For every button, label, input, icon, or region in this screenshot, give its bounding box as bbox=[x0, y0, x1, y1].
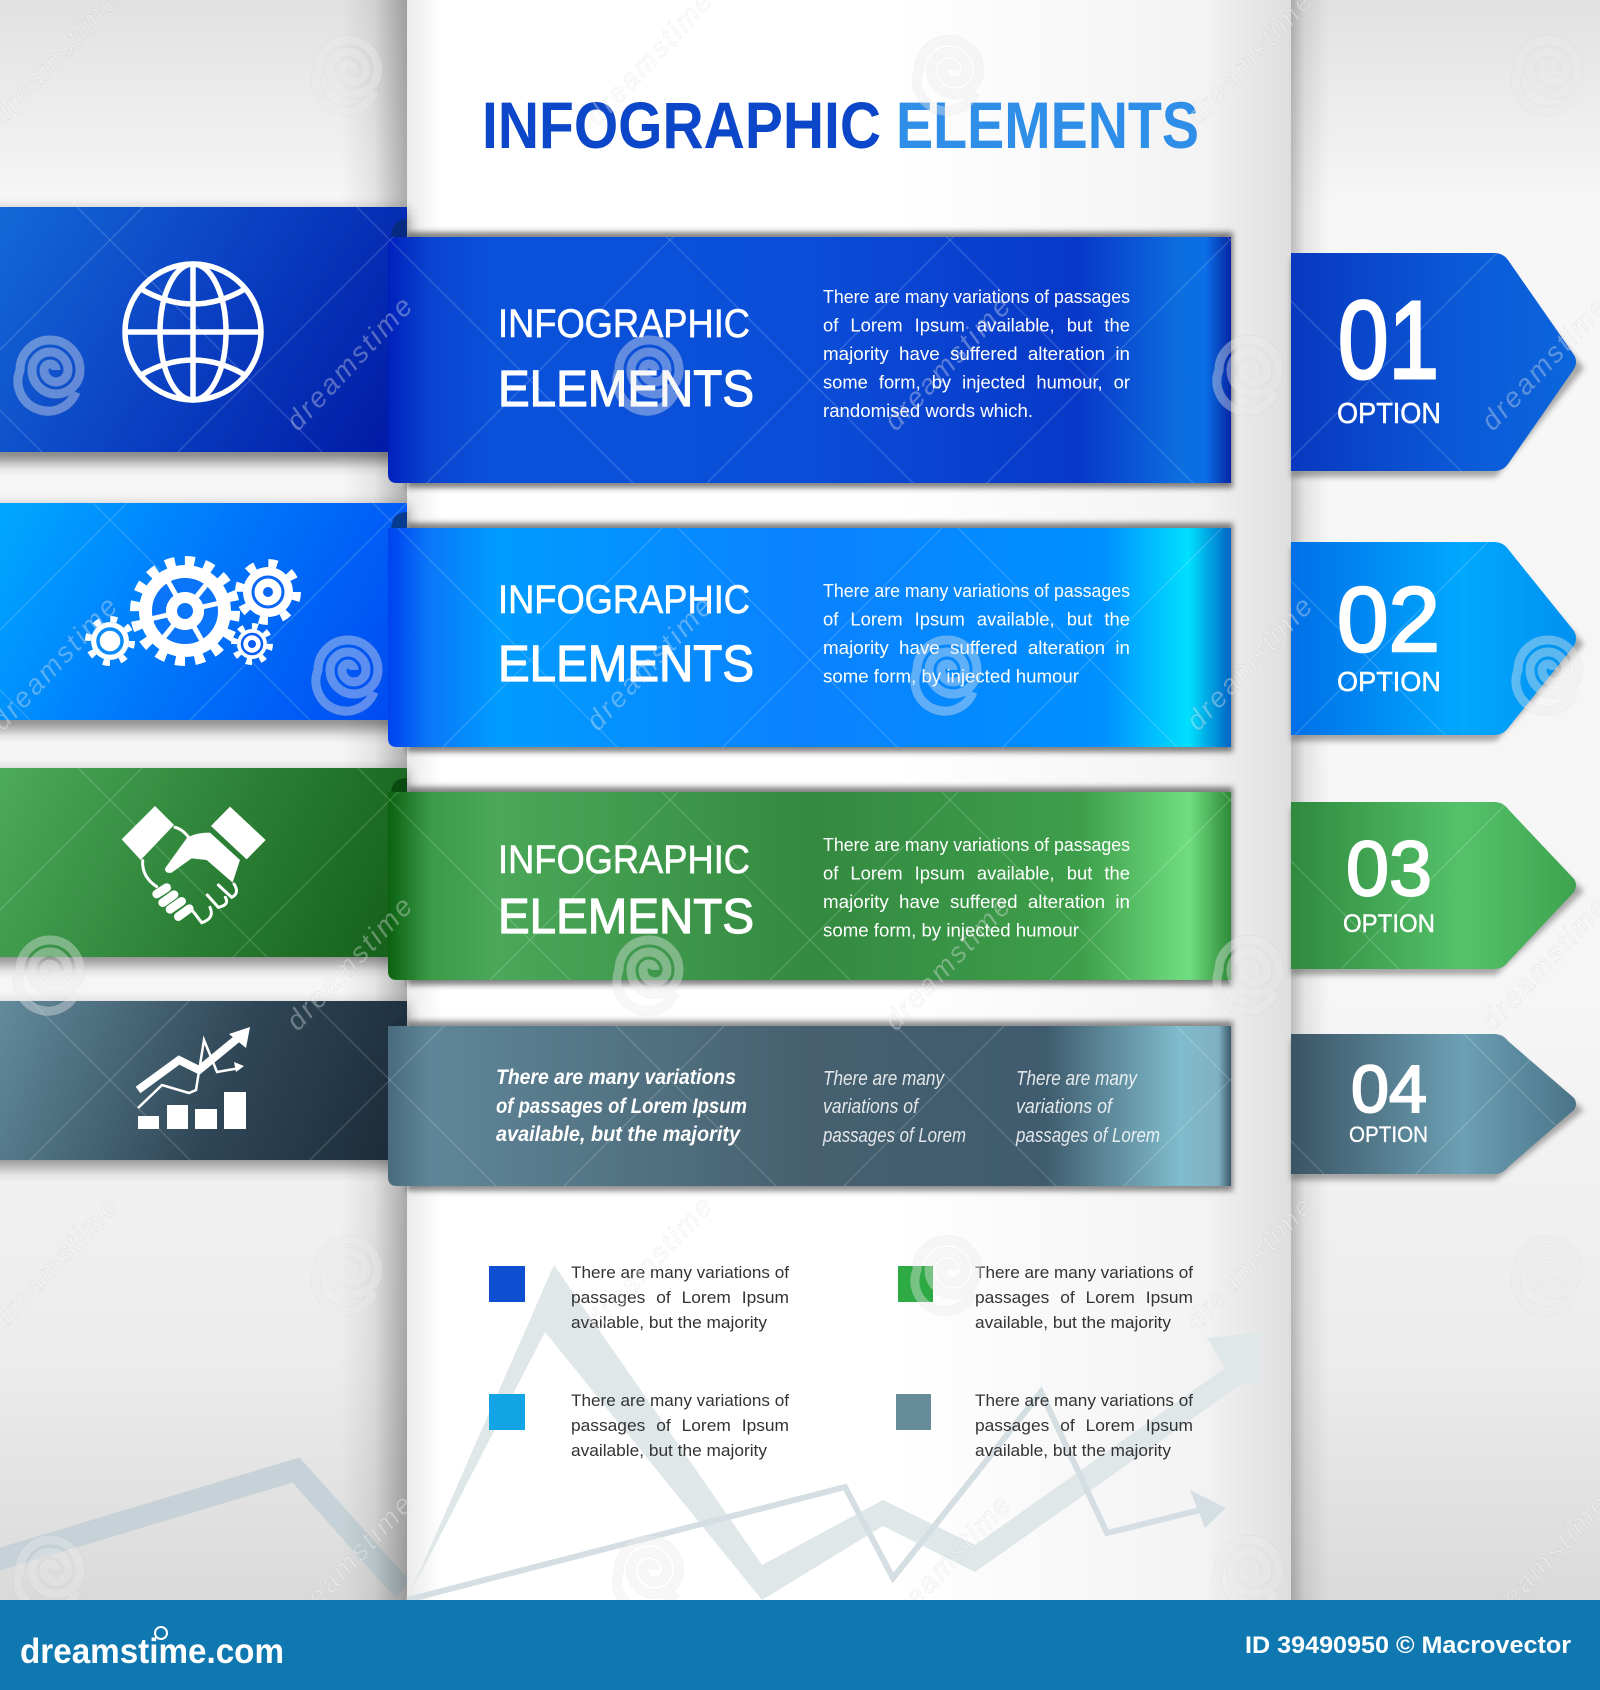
legend item: green: There are many variations of bbox=[975, 1263, 1193, 1282]
arrow tag 03: 03 bbox=[1346, 824, 1432, 912]
ribbon italic column 1 bbox=[822, 1068, 966, 1147]
ribbon bold italic text: There are many variations bbox=[496, 1066, 736, 1089]
ribbon body text bbox=[823, 286, 1130, 421]
legend item: blue bbox=[489, 1263, 789, 1332]
shadow of center panel bbox=[340, 0, 1329, 1600]
arrow tag 01: OPTION bbox=[1337, 398, 1441, 430]
legend item: green: passages of Lorem Ipsum bbox=[975, 1288, 1193, 1307]
ribbon italic column 1: passages of Lorem bbox=[822, 1125, 966, 1147]
panel: left ribbon 1 bbox=[0, 207, 407, 462]
watermark text: dreamstime bbox=[1180, 591, 1318, 736]
legend item: slate: available, but the majority bbox=[975, 1441, 1171, 1460]
watermark text: dreamstime bbox=[1180, 1191, 1318, 1336]
arrow tag 01 bbox=[1291, 253, 1584, 477]
ribbon italic column 2: variations of bbox=[1016, 1096, 1114, 1118]
legend item: green: available, but the majority bbox=[975, 1313, 1171, 1332]
legend item: slate: There are many variations of bbox=[975, 1391, 1193, 1410]
ribbon italic column 1: There are many bbox=[823, 1068, 945, 1090]
ribbon body text: some form, by injected humour bbox=[823, 920, 1079, 940]
center panel bbox=[407, 0, 1291, 1600]
ribbon bold italic text bbox=[496, 1066, 747, 1146]
ribbon body text bbox=[823, 580, 1130, 686]
ribbon body text: There are many variations of passages bbox=[823, 834, 1130, 855]
title: INFOGRAPHIC bbox=[482, 88, 881, 162]
panel: left ribbon 4 bbox=[0, 1001, 407, 1168]
ribbon heading: INFOGRAPHIC bbox=[498, 578, 750, 622]
ribbon body text: majority have suffered alteration in bbox=[823, 343, 1130, 364]
panel: front ribbon 4 bbox=[388, 1017, 1233, 1191]
ribbon body text: randomised words which. bbox=[823, 400, 1033, 421]
background trend arrows in center panel bbox=[407, 1265, 1261, 1600]
ribbon italic column 1: variations of bbox=[823, 1096, 920, 1118]
panel: front ribbon 1 bbox=[388, 219, 1233, 488]
legend item: slate bbox=[896, 1391, 1193, 1460]
ribbon body text: majority have suffered alteration in bbox=[823, 637, 1130, 658]
arrow tag 02: 02 bbox=[1337, 569, 1440, 671]
watermark text: dreamstime bbox=[878, 291, 1016, 436]
panel: front ribbon 2 bbox=[388, 512, 1233, 752]
arrow tag 04: OPTION bbox=[1349, 1122, 1428, 1147]
legend item: slate: passages of Lorem Ipsum bbox=[975, 1416, 1193, 1435]
ribbon body text: of Lorem Ipsum available, but the bbox=[823, 608, 1130, 630]
arrow tag 03 bbox=[1291, 802, 1584, 975]
arrow tag 04: 04 bbox=[1351, 1052, 1427, 1127]
arrow tag 04 bbox=[1291, 1034, 1584, 1180]
watermark text: dreamstime bbox=[878, 891, 1016, 1036]
ribbon bold italic text: of passages of Lorem Ipsum bbox=[496, 1095, 747, 1118]
ribbon heading: INFOGRAPHIC bbox=[498, 838, 750, 882]
ribbon italic column 2 bbox=[1015, 1068, 1160, 1147]
faint arrow line: left background bbox=[0, 1470, 403, 1590]
title: ELEMENTS bbox=[896, 88, 1199, 162]
ribbon italic column 2: There are many bbox=[1016, 1068, 1138, 1090]
legend item: blue: passages of Lorem Ipsum bbox=[571, 1288, 789, 1307]
legend item: green bbox=[898, 1263, 1193, 1332]
icon: gears bbox=[88, 562, 297, 663]
panel: left ribbon 2 bbox=[0, 503, 407, 730]
ribbon italic column 2: passages of Lorem bbox=[1015, 1125, 1160, 1147]
arrow tag 02 bbox=[1291, 542, 1584, 741]
arrow tag 03: OPTION bbox=[1343, 910, 1435, 938]
ribbon body text: some form, by injected humour, or bbox=[823, 372, 1130, 392]
legend item: cyan: available, but the majority bbox=[571, 1441, 767, 1460]
ribbon heading bbox=[498, 838, 754, 944]
arrow tag 01: 01 bbox=[1338, 279, 1439, 402]
ribbon heading: ELEMENTS bbox=[498, 890, 754, 944]
ribbon body text: of Lorem Ipsum available, but the bbox=[823, 862, 1130, 884]
footer logo: dreamstime.com bbox=[20, 1632, 284, 1671]
watermark text: dreamstime bbox=[878, 1489, 1016, 1634]
ribbon heading: ELEMENTS bbox=[498, 360, 754, 417]
ribbon bold italic text: available, but the majority bbox=[496, 1123, 741, 1146]
watermark text: dreamstime bbox=[580, 591, 718, 736]
icon: handshake bbox=[122, 806, 266, 923]
icon: growth chart bbox=[138, 1027, 250, 1129]
ribbon heading bbox=[498, 302, 754, 417]
ribbon body text: some form, by injected humour bbox=[823, 666, 1079, 686]
ribbon heading bbox=[498, 578, 754, 692]
watermark text: dreamstime bbox=[280, 291, 418, 436]
footer bar bbox=[0, 1600, 1600, 1690]
icon: globe bbox=[125, 264, 261, 400]
watermark text: dreamstime bbox=[280, 1489, 418, 1634]
legend item: cyan: passages of Lorem Ipsum bbox=[571, 1416, 789, 1435]
legend item: cyan: There are many variations of bbox=[571, 1391, 789, 1410]
panel: front ribbon 3 bbox=[388, 778, 1233, 985]
watermark text: dreamstime bbox=[280, 891, 418, 1036]
ribbon body text: There are many variations of passages bbox=[823, 580, 1130, 601]
ribbon heading: INFOGRAPHIC bbox=[498, 302, 750, 346]
legend item: cyan bbox=[489, 1391, 789, 1460]
legend item: blue: available, but the majority bbox=[571, 1313, 767, 1332]
panel: left ribbon 3 bbox=[0, 768, 407, 965]
ribbon heading: ELEMENTS bbox=[498, 635, 754, 692]
arrow tag 02: OPTION bbox=[1337, 666, 1441, 697]
ribbon body text bbox=[823, 834, 1130, 940]
legend item: blue: There are many variations of bbox=[571, 1263, 789, 1282]
ribbon body text: of Lorem Ipsum available, but the bbox=[823, 314, 1130, 336]
ribbon body text: There are many variations of passages bbox=[823, 286, 1130, 307]
footer credit: ID 39490950 © Macrovector bbox=[1245, 1632, 1571, 1659]
ribbon body text: majority have suffered alteration in bbox=[823, 891, 1130, 912]
title bbox=[482, 88, 1199, 162]
watermark text: dreamstime bbox=[580, 1191, 718, 1336]
